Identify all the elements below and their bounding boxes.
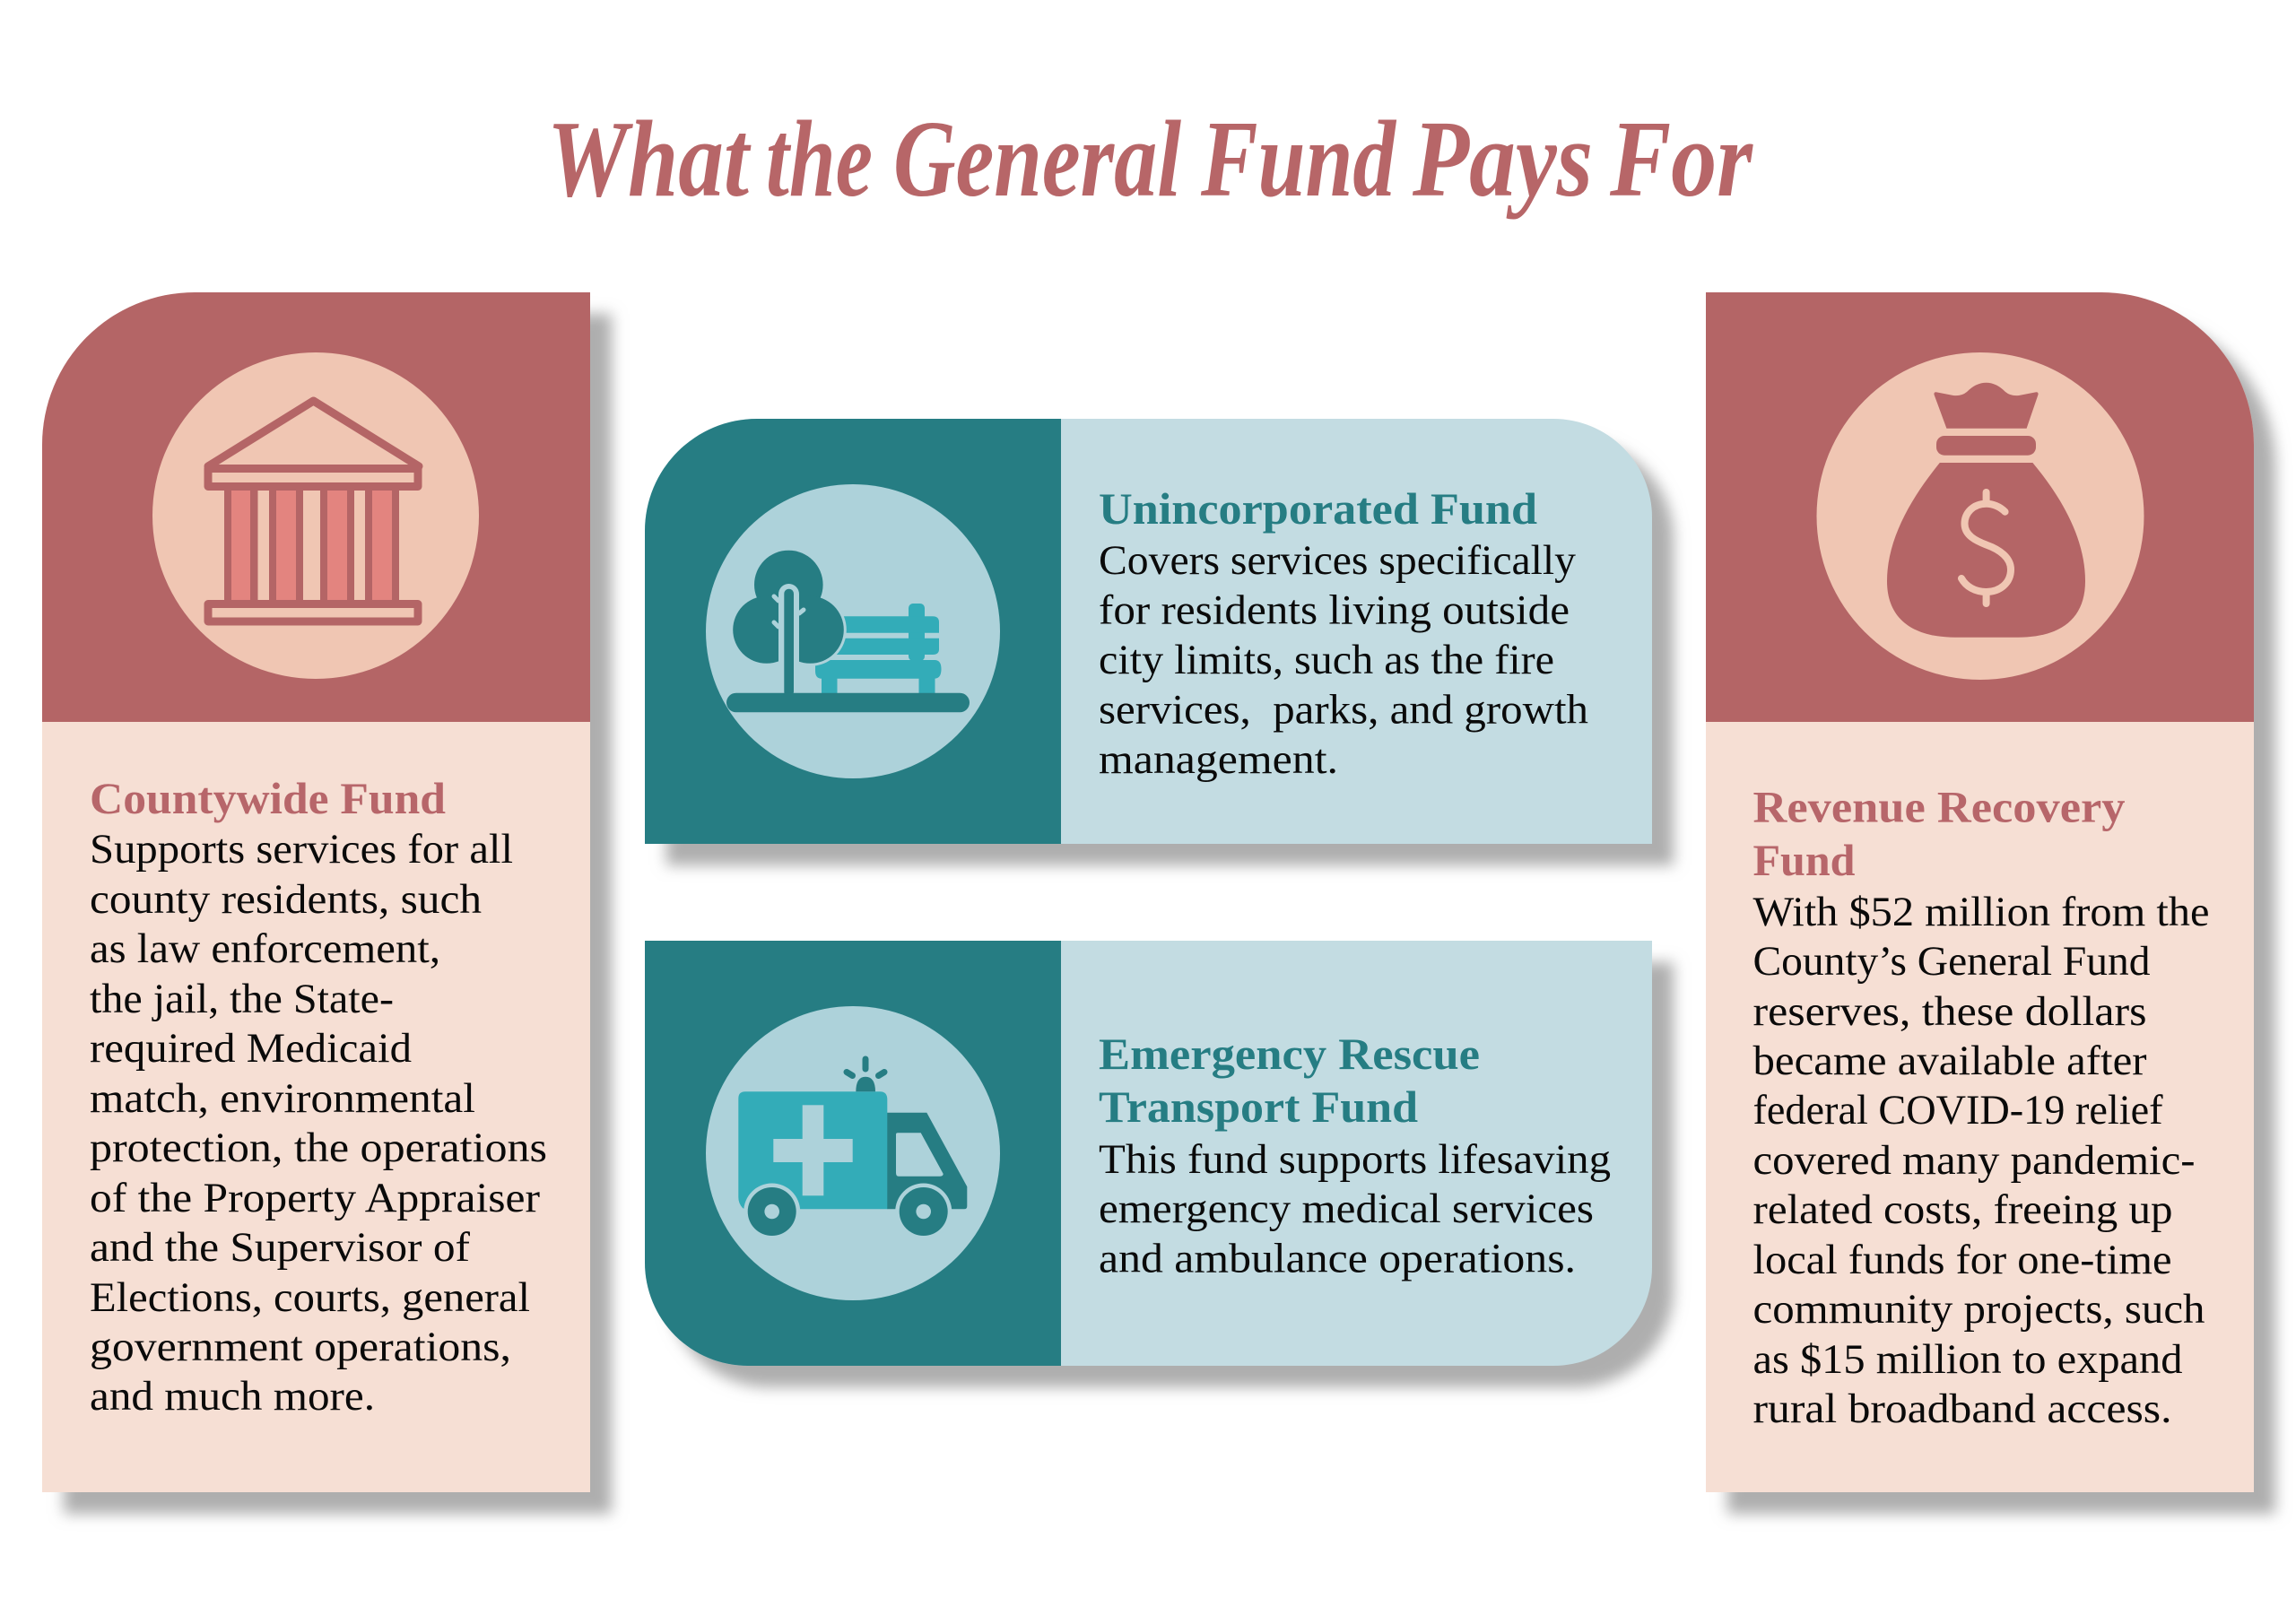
text block: Revenue Recovery Fund description: related costs, freeing up <box>1752 1186 2172 1233</box>
text block: Countywide Fund description: Elections, courts, general <box>90 1274 530 1321</box>
heading: Revenue Recovery Fund: Revenue Recovery <box>1752 782 2126 832</box>
text block: Countywide Fund description: as law enforcement, <box>90 925 440 972</box>
text block: Revenue Recovery Fund description: With $52 million from the <box>1752 889 2210 935</box>
text block: Countywide Fund description: Supports services for all <box>90 826 513 873</box>
text block: Countywide Fund description: the jail, the State- <box>90 976 394 1022</box>
text block: Countywide Fund description: county residents, such <box>90 876 482 923</box>
text block: Countywide Fund description: of the Property Appraiser <box>90 1175 540 1221</box>
title: the <box>766 99 873 220</box>
text block: Countywide Fund description: match, environmental <box>90 1075 475 1122</box>
text block: Revenue Recovery Fund description: rural broadband access. <box>1752 1385 2172 1432</box>
title: General <box>893 99 1181 220</box>
text block: Unincorporated Fund description: services, parks, and growth <box>1099 687 1588 734</box>
text block: Emergency Rescue Transport Fund description: emergency medical services <box>1099 1186 1594 1232</box>
panel: Emergency Rescue Transport Fund <box>645 941 1652 1366</box>
text block: Countywide Fund description: and much more. <box>90 1373 375 1420</box>
text block: Unincorporated Fund description: management. <box>1099 736 1338 783</box>
text block: Unincorporated Fund description: Covers services specifically <box>1099 537 1576 584</box>
icon: ambulance <box>706 1006 1000 1300</box>
text block: Unincorporated Fund description: city limits, such as the fire <box>1099 637 1554 683</box>
text block: Revenue Recovery Fund description: local funds for one-time <box>1752 1237 2172 1283</box>
heading: Revenue Recovery Fund: Fund <box>1752 835 1856 885</box>
panel: Unincorporated Fund <box>645 419 1652 844</box>
text block: Emergency Rescue Transport Fund description <box>1099 1136 1611 1282</box>
heading: Unincorporated Fund: Unincorporated Fund <box>1099 483 1537 534</box>
text block: Revenue Recovery Fund description: County’s General Fund <box>1752 938 2151 985</box>
text block: Countywide Fund description: required Medicaid <box>90 1025 412 1072</box>
icon: money bag <box>1817 352 2144 680</box>
panel: Revenue Recovery Fund <box>1706 292 2254 1492</box>
title: Pays <box>1412 99 1593 220</box>
title: Fund <box>1200 99 1397 220</box>
icon: park tree and bench <box>706 484 1000 778</box>
panel: Countywide Fund <box>42 292 590 1492</box>
text block: Emergency Rescue Transport Fund description: This fund supports lifesaving <box>1099 1136 1611 1183</box>
heading: Countywide Fund: Countywide Fund <box>90 773 446 823</box>
text block: Revenue Recovery Fund description: as $15 million to expand <box>1752 1336 2183 1383</box>
icon: courthouse <box>152 352 479 679</box>
text block: Revenue Recovery Fund description: federal COVID-19 relief <box>1752 1087 2163 1134</box>
heading: Emergency Rescue Transport Fund: Transport Fund <box>1099 1081 1418 1132</box>
text block: Revenue Recovery Fund description: covered many pandemic- <box>1752 1137 2196 1184</box>
text block: Revenue Recovery Fund description <box>1752 889 2210 1432</box>
heading: Revenue Recovery Fund <box>1752 782 2126 885</box>
text block: Countywide Fund description: government operations, <box>90 1324 511 1370</box>
text block: Countywide Fund description: protection, the operations <box>90 1125 547 1171</box>
text block: Unincorporated Fund description <box>1099 537 1588 783</box>
title: What <box>547 99 752 220</box>
heading: Emergency Rescue Transport Fund <box>1099 1029 1480 1132</box>
text block: Countywide Fund description: and the Supervisor of <box>90 1224 470 1271</box>
text block: Unincorporated Fund description: for residents living outside <box>1099 586 1570 633</box>
text block: Emergency Rescue Transport Fund description: and ambulance operations. <box>1099 1236 1576 1282</box>
heading: Emergency Rescue Transport Fund: Emergency Rescue <box>1099 1029 1480 1079</box>
text block: Revenue Recovery Fund description: reserves, these dollars <box>1752 988 2147 1035</box>
title: For <box>1609 99 1753 220</box>
text block: Revenue Recovery Fund description: community projects, such <box>1752 1286 2205 1333</box>
title <box>547 99 1753 220</box>
text block: Revenue Recovery Fund description: became available after <box>1752 1038 2147 1084</box>
text block: Countywide Fund description <box>90 826 547 1420</box>
